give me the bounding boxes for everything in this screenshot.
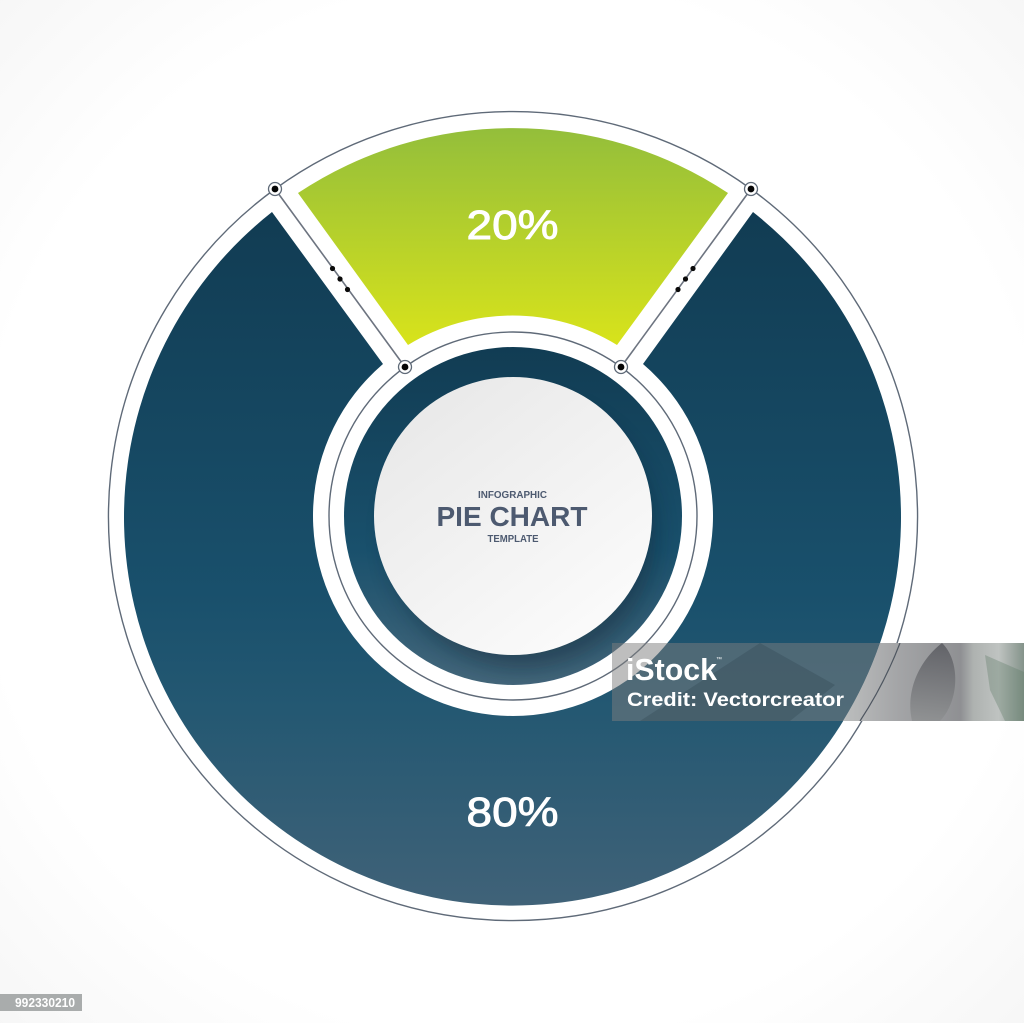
node top right	[744, 182, 758, 196]
center title: INFOGRAPHIC	[478, 490, 547, 501]
node top left	[268, 182, 282, 196]
image id badge	[0, 994, 82, 1011]
center disc	[374, 377, 652, 655]
outer ring line	[108, 112, 918, 921]
watermark	[612, 643, 1024, 721]
node inner right	[614, 360, 628, 374]
segment: 80% blue	[124, 212, 901, 906]
node inner left	[398, 360, 412, 374]
center title: PIE CHART	[436, 501, 588, 532]
label 80%: 80%	[466, 789, 558, 835]
label 20%: 20%	[466, 202, 558, 248]
watermark text: iStock	[626, 652, 718, 687]
dots left	[330, 266, 350, 292]
center title	[436, 490, 588, 545]
center disc shadow	[390, 478, 662, 676]
image id badge: 992330210	[15, 996, 75, 1010]
divider left	[275, 189, 405, 367]
watermark: Credit: Vectorcreator	[627, 689, 844, 711]
inner dark circle	[344, 347, 682, 685]
segment: 20% green	[298, 128, 728, 345]
center title: TEMPLATE	[488, 534, 539, 545]
watermark: ™	[716, 656, 722, 663]
divider right	[621, 189, 751, 367]
dots right	[675, 266, 696, 292]
inner ring line	[329, 332, 697, 700]
